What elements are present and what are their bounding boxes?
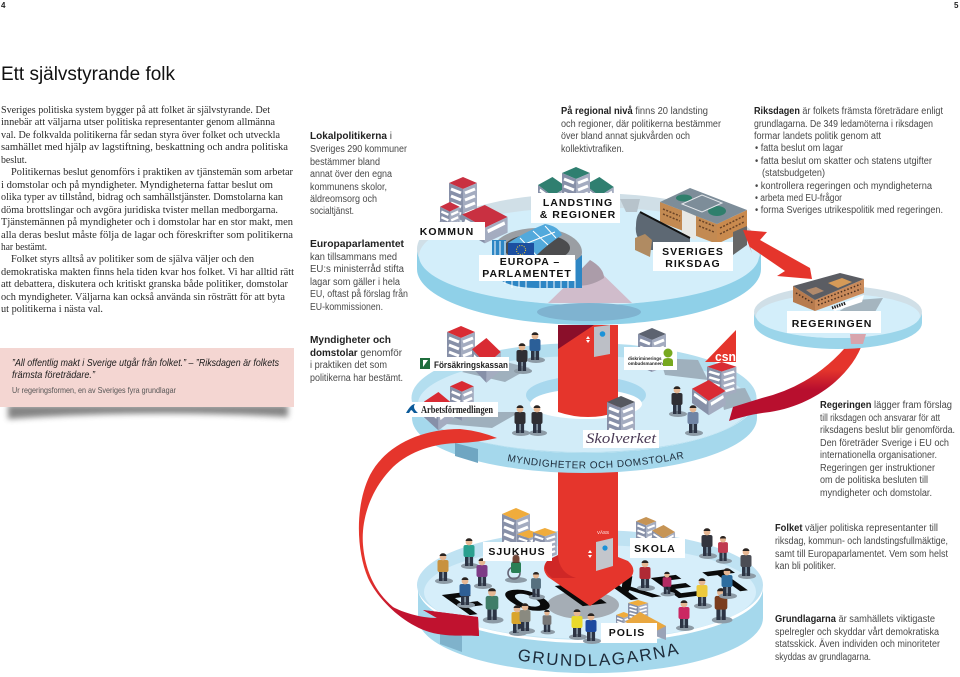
text block: introduction: Sveriges politiska system bygger på att folket är självstyrande. Det [1,104,270,116]
text block: riksdagen: • fatta beslut om lagar [755,143,844,154]
icon: regeringen building [793,273,864,311]
text block: introduction: Tjänstemännen på myndigheter och i domstolar har en stor makt, men [1,216,293,228]
text block: lokalpolitikerna: bestämmer bland [310,157,380,168]
panel: middle ring myndigheter och domstolar [412,344,757,473]
label: polis [601,623,657,643]
big word folket: T [694,563,765,598]
shadow patches [462,357,530,382]
label: diskrimineringsombudsmannen: diskriminerings [628,356,662,361]
icon: landsting buildings [538,167,614,211]
icon: europaparlamentet building [492,224,582,288]
big word folket: K [592,571,668,606]
label: skolverket: Skolverket [586,431,657,447]
text block: regeringen: om de politiska besluten till [820,475,928,486]
icon: arbetsförmedlingen building [424,381,474,430]
icon: skola building [636,517,675,548]
label: diskrimineringsombudsmannen [624,347,677,370]
text block: regional nivå: över bland annat sjukvården och [561,130,690,142]
text block: introduction: samhället med hjälp av lagstiftning, beskattning och andra politiska [1,141,288,153]
title: Ett självstyrande folk [1,64,175,85]
text block: introduction: döma brottslingar och avgöra juridiska tvister mellan medborgarna. [1,204,278,216]
icon: csn logo and building [692,330,736,415]
label: sveriges riksdag: SVERIGES [662,246,724,258]
text block: regeringen: Regeringen lägger fram förslag [820,400,952,411]
label: sveriges riksdag: RIKSDAG [665,258,721,270]
text block: regional nivå: kollektivtrafiken. [561,144,624,155]
text block: introduction: alla deras beslut måste följa de lagar och föreskrifter som politikerna [1,229,293,241]
label: europaparlamentet [479,255,575,281]
text block: lokalpolitikerna: annat över den egna [310,169,392,180]
label: polis: POLIS [609,627,645,639]
text block: introduction: demokratiska makten finns hela tiden kvar hos folket. Vi har alltid rätt [1,266,294,278]
text block: riksdagen: • forma Sveriges utrikespolitik med regeringen. [755,205,943,216]
text block: lokalpolitikerna: kommunens skolor, [310,182,387,193]
text block: grundlagarna: statsskick. Även individen och minoriteter [775,638,941,650]
text block: lokalpolitikerna: socialtjänst. [310,206,354,217]
text block: regional nivå [561,105,722,155]
text block: riksdagen [754,106,943,216]
callout: quote box: främsta företrädare.” [12,369,95,381]
callout: quote box: ”All offentlig makt i Sverige utgår från folket.” – ”Riksdagen är folkets [12,357,280,369]
text block: introduction: i domstolar och på myndigheter. Myndigheterna fattar beslut om [1,179,273,191]
big word folket: E [640,569,714,604]
label: arbetsförmedlingen: Arbetsförmedlingen [421,405,493,416]
people on bottom disc [435,528,756,644]
text block: regeringen: Den företräder Sverige i EU och [820,438,949,449]
text block: introduction: ut politikerna i nästa val. [1,303,103,315]
panel: bottom disc grundlagarna [417,530,765,674]
label: skola: SKOLA [634,543,676,555]
text block: riksdagen: Riksdagen är folkets främsta företrädare enligt [754,106,943,117]
label: landsting och regioner [531,193,620,223]
big word folket: O [488,582,567,618]
door on the arrow: VÄSS [597,529,609,535]
label: sjukhus: SJUKHUS [488,546,546,558]
people on middle ring [512,332,703,436]
text block: myndigheter och domstolar: domstolar genomför [310,348,403,359]
text block: europaparlamentet: EU:s ministerråd stifta [310,263,404,275]
text block: lokalpolitikerna: Lokalpolitikerna i [310,131,392,142]
arrow: curved from myndigheter to folket [359,429,497,636]
icon: kommun buildings [440,177,508,243]
text block: lokalpolitikerna: Sveriges 290 kommuner [310,144,408,155]
callout: quote box [0,348,294,419]
text block: introduction: och myndigheter. Väljarna kan också använda sin rösträtt för att byta [1,291,285,303]
label: europaparlamentet: EUROPA – [500,256,560,268]
text block: riksdagen: grundlagarna. De 349 ledamöterna i riksdagen [754,119,933,130]
text block: introduction [1,104,294,315]
icon: skolverket building [607,396,635,440]
label: regeringen: REGERINGEN [792,318,872,330]
arrow: curved head into folket disc [423,610,479,636]
arrow: red shaft lower with head [544,470,633,606]
callout: quote box: Ur regeringsformen, en av Sveriges fyra grundlagar [12,385,176,395]
text block: riksdagen: • arbeta med EU-frågor [755,192,843,204]
big word folket: F [431,586,502,621]
text block: grundlagarna: spelregler och skyddar vårt demokratiska [775,626,939,638]
text block: regeringen: Regeringen ger instruktioner [820,463,936,474]
ring title: MYNDIGHETER OCH DOMSTOLAR [508,452,684,468]
arrow: red shaft upper [558,325,618,417]
text block: riksdagen: formar landets politik genom att [754,131,881,142]
text block: introduction: Folket styrs alltså av politiker som de själva väljer och den [11,253,254,265]
label: försäkringskassan: Försäkringskassan [434,360,508,371]
text block: regional nivå: På regional nivå finns 20 landsting [561,105,708,117]
icon: riksdag building [635,188,747,257]
text block: introduction: har bestämt. [1,241,47,253]
text block: riksdagen: • kontrollera regeringen och myndigheterna [755,181,932,192]
icon: csn logo and building: csn [715,349,736,364]
arrow shadow [547,591,619,619]
icon: grey agency building [638,328,666,372]
text block: introduction: olika typer av tillstånd, bidrag och samhällstjänster. Domstolarna kan [1,191,283,203]
ring hole [526,376,646,414]
text block: folket: Folket väljer politiska representanter till [775,523,938,534]
icon: sjukhus building [502,508,557,561]
text block: regeringen [820,400,955,499]
label: skola [630,538,685,558]
icon: polis building [616,600,666,640]
label: landsting och regioner: LANDSTING [543,197,613,209]
text block: europaparlamentet: Europaparlamentet [310,239,405,250]
arrow shadow through disc [548,262,632,303]
label: europaparlamentet: PARLAMENTET [482,268,572,280]
text block: introduction: innebär att väljarna utser politiska representanter genom allmänna [1,116,275,128]
text block: europaparlamentet: lagar som gäller i hela [310,277,400,288]
arrow: riksdag to regeringen [743,230,812,279]
text block: lokalpolitikerna: äldreomsorg och [310,194,377,205]
label: försäkringskassan [419,357,509,371]
text block: folket [775,523,948,572]
label: regeringen [787,311,881,333]
text block: europaparlamentet: EU, oftast på förslag från [310,288,408,300]
text block: europaparlamentet [310,239,408,313]
icon: försäkringskassan building [447,326,501,383]
text block: regeringen: myndigheter och domstolar. [820,488,932,499]
text block: introduction: val. De folkvalda politikerna får sedan styra över folket och utveckla [1,129,280,141]
text block: grundlagarna: skyddas av grundlagarna. [775,652,871,663]
text block: regional nivå: och regioner, där politikerna bestämmer [561,119,722,130]
page number left: 4 [1,1,6,10]
text block: myndigheter och domstolar [310,335,403,384]
text block: folket: kan bli politiker. [775,561,836,572]
text block: regeringen: internationella organisationer. [820,450,937,461]
text block: introduction: beslut. [1,154,27,166]
label: arbetsförmedlingen [405,402,498,417]
panel: regeringen disc [754,273,922,349]
big word folket: L [544,577,615,612]
big word folket [431,563,765,621]
text block: myndigheter och domstolar: Myndigheter och [310,335,391,346]
icon: person in wheelchair [505,554,527,583]
text block: introduction: Politikernas beslut genomförs i praktiken av tjänstemän som arbetar [11,166,293,178]
text block: introduction: att debattera, diskutera och kritiskt granska både politiker, domstolar [1,278,288,290]
label: sveriges riksdag [653,242,733,271]
text block: grundlagarna: Grundlagarna är samhällets viktigaste [775,614,935,625]
label: landsting och regioner: & REGIONER [540,209,616,221]
text block: europaparlamentet: kan tillsammans med [310,252,397,263]
text block: riksdagen: • fatta beslut om skatter och statens utgifter [755,156,933,167]
label: kommun [417,222,485,240]
text block: myndigheter och domstolar: politikerna har bestämt. [310,373,403,384]
arrow: curved from regeringen to myndigheter [729,342,863,421]
label: kommun: KOMMUN [420,226,474,238]
label: diskrimineringsombudsmannen: ombudsmannen [628,361,663,366]
text block: grundlagarna [775,614,941,663]
text block: myndigheter och domstolar: i praktiken det som [310,360,387,371]
text block: riksdagen: (statsbudgeten) [762,168,825,179]
text block: lokalpolitikerna [310,131,408,217]
panel: top disc politik [417,193,761,325]
text block: europaparlamentet: EU-kommissionen. [310,302,383,313]
label: sjukhus [483,542,552,561]
title on disc edge: GRUNDLAGARNA [518,644,679,666]
page number right: 5 [954,1,959,10]
